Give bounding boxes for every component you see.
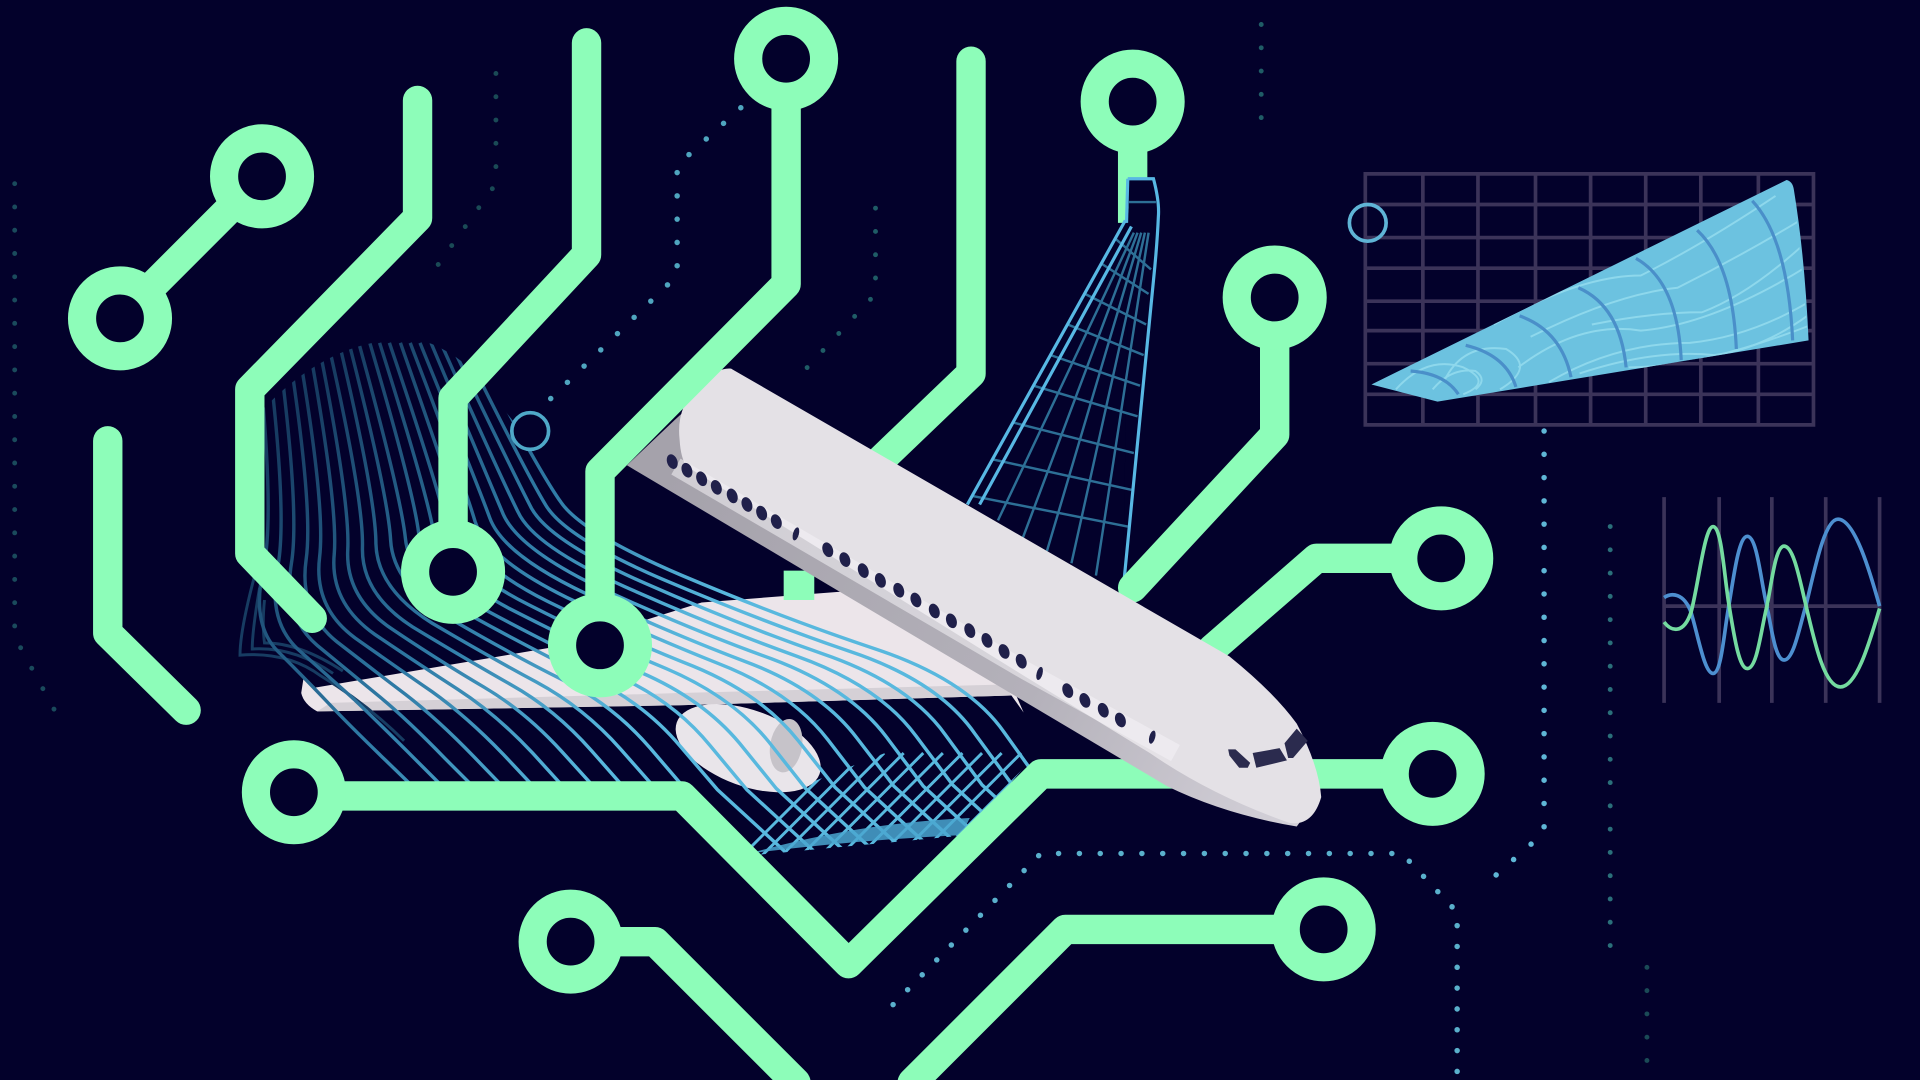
mesh crossing lines: [751, 752, 1022, 854]
circuit traces behind plane: [294, 61, 1441, 964]
fuselage windows: [665, 453, 1157, 744]
plane fuselage: [627, 368, 1321, 827]
circuit nodes in front of plane: [82, 21, 1362, 980]
circuit nodes right of plane: [256, 64, 1479, 830]
aerodynamic flow mesh: [258, 342, 1030, 852]
tail fin wireframe: [967, 147, 1159, 593]
mesh dense lower edge: [749, 818, 970, 853]
chart: sine waves: [1664, 497, 1880, 703]
fuselage window strip: [676, 467, 1176, 753]
trace fragment under wing: [784, 571, 814, 600]
faint outer flow lines: [240, 576, 404, 741]
icon: mesh ring: [512, 413, 549, 449]
chart: wing surface on grid: [1365, 174, 1813, 425]
plane wing: [301, 591, 1024, 713]
plane engine: [664, 687, 832, 810]
cockpit windows: [1228, 729, 1308, 768]
icon: small chart ring: [1349, 204, 1386, 241]
circuit traces in front of plane: [108, 43, 1324, 1080]
